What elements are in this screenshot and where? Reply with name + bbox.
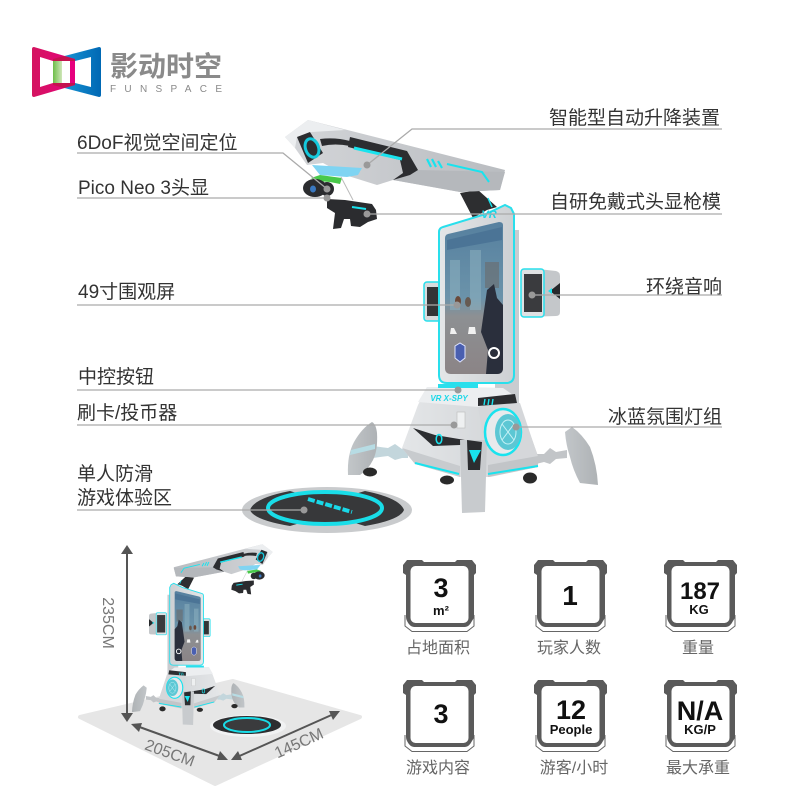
stat: game content: [403, 680, 476, 777]
machine: VR simulator main view: [285, 120, 598, 513]
tower panel: [439, 205, 514, 383]
caption: 占地面积: [406, 639, 470, 657]
depth label: 145CM: [272, 726, 326, 762]
height label: 235CM: [99, 597, 116, 649]
label: 冰蓝氛围灯组: [608, 406, 722, 428]
depth arrow: [231, 711, 340, 760]
card frame: [664, 560, 737, 632]
card frame: [534, 680, 607, 752]
value: 12: [556, 695, 586, 725]
leader: [77, 302, 460, 308]
label: 6DoF视觉空间定位: [77, 132, 237, 154]
logo wordmark: 影动时空: [110, 51, 222, 82]
small floor disc: [210, 715, 286, 737]
stat: weight: [664, 560, 737, 657]
stat: players: [534, 560, 607, 657]
dimension diagram: [80, 544, 360, 784]
logo mark: [32, 47, 101, 97]
label: 刷卡/投币器: [77, 402, 177, 424]
game screen: [445, 222, 503, 374]
leader: [77, 422, 458, 428]
anti-slip floor disc: [242, 487, 412, 533]
label: 环绕音响: [646, 276, 722, 298]
ice-blue light dial: [485, 409, 521, 455]
stat: max load: [664, 680, 737, 777]
raised arm: [285, 120, 505, 192]
value: N/A: [677, 696, 723, 726]
unit: KG: [689, 602, 709, 617]
callout: play area: [77, 463, 308, 514]
callout: gun: [364, 191, 722, 218]
leader: [77, 153, 330, 192]
card frame: [664, 680, 737, 752]
headset and gun: [303, 177, 377, 229]
leader: [528, 292, 722, 298]
value: 3: [433, 699, 449, 729]
leader: [77, 194, 330, 202]
leader: [364, 210, 722, 218]
VR X-SPY mark on base: VR X-SPY: [430, 394, 468, 403]
card frame: [403, 560, 476, 632]
caption: 最大承重: [666, 759, 730, 777]
label: 智能型自动升降装置: [549, 107, 720, 129]
callout: control button: [77, 366, 462, 394]
width label: 205CM: [142, 737, 197, 771]
logo: [32, 47, 222, 97]
callout: Pico Neo 3: [77, 177, 330, 202]
width arrow: [131, 723, 228, 760]
label: 49寸围观屏: [78, 281, 175, 303]
side speaker right: [521, 269, 560, 317]
side speaker left: [424, 282, 442, 321]
leader: [512, 424, 722, 430]
card frame: [403, 680, 476, 752]
arm mount: [460, 190, 497, 218]
leader: [364, 129, 722, 168]
stat: visitors per hour: [534, 680, 608, 777]
label: 中控按钮: [78, 366, 154, 388]
caption: 游客/小时: [540, 759, 608, 777]
callout: surround sound: [528, 276, 722, 298]
floor plane: [80, 681, 360, 784]
VR mark on tower: VR: [481, 209, 497, 221]
height arrow: [121, 545, 133, 722]
stat: floor area: [403, 560, 476, 657]
rear wing left: [348, 422, 408, 475]
support column: [495, 230, 519, 410]
wheels: [363, 468, 537, 484]
callout: ice-blue lights: [512, 406, 722, 430]
callout: auto lift device: [364, 107, 722, 168]
value: 187: [680, 578, 720, 605]
unit: KG/P: [684, 722, 716, 737]
unit: m²: [433, 603, 450, 618]
base body: [402, 384, 538, 477]
value: 1: [562, 580, 578, 611]
leader: [77, 386, 462, 394]
unit: People: [550, 722, 592, 737]
label: 游戏体验区: [77, 487, 172, 509]
label: Pico Neo 3头显: [78, 177, 209, 199]
callout: 49 inch screen: [77, 281, 460, 308]
leader: [77, 506, 308, 514]
value: 3: [433, 573, 449, 603]
label: 自研免戴式头显枪模: [550, 191, 721, 213]
caption: 重量: [682, 639, 714, 657]
caption: 游戏内容: [406, 759, 470, 777]
card frame: [534, 560, 607, 632]
small machine: [132, 544, 273, 725]
callout: 6DoF: [77, 132, 330, 192]
rear wing right: [536, 427, 598, 485]
front leg: [460, 440, 487, 513]
logo subtitle: FUNSPACE: [110, 84, 222, 95]
caption: 玩家人数: [537, 639, 601, 657]
label: 单人防滑: [77, 463, 153, 485]
callout: card reader: [77, 402, 458, 428]
